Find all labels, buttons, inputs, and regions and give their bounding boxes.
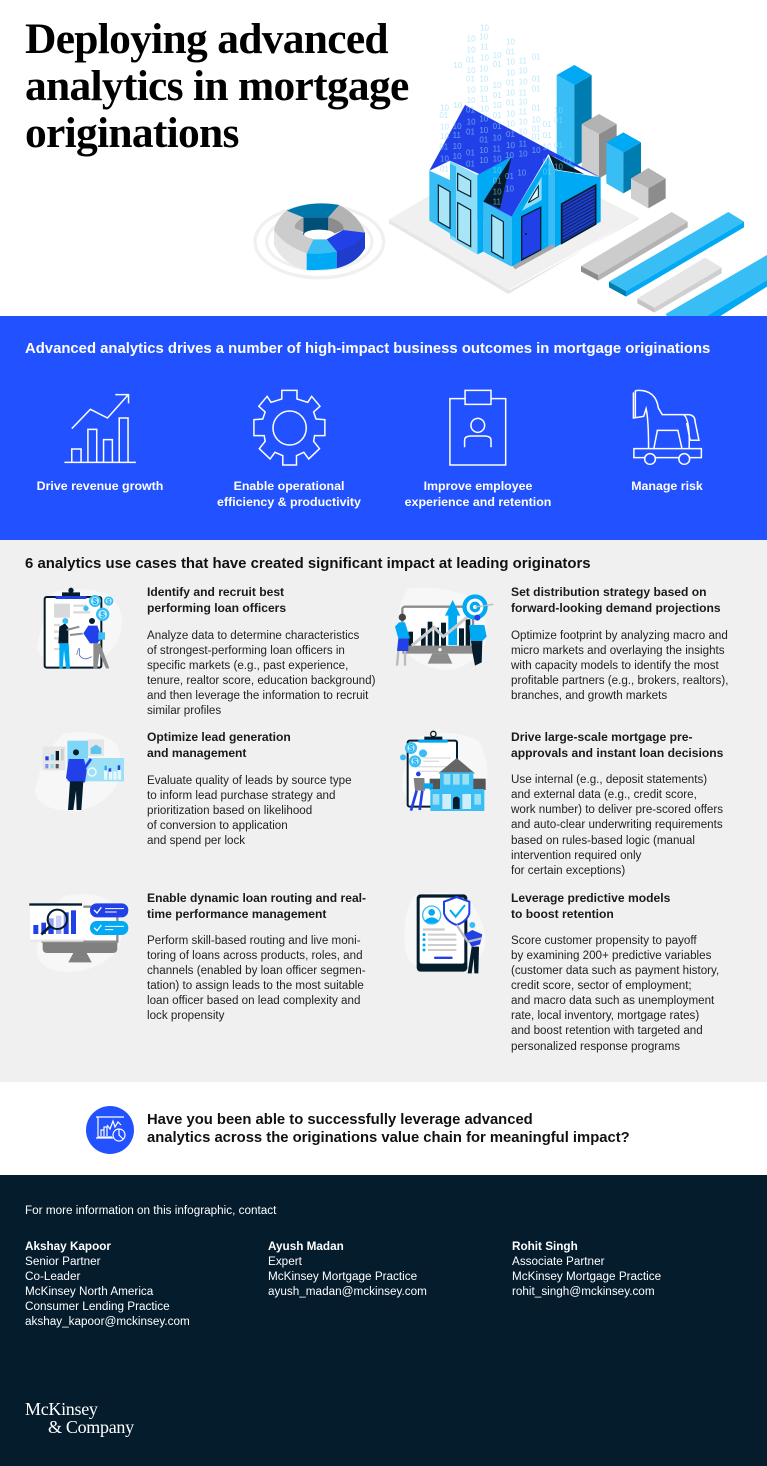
use case 3 heading <box>147 891 366 921</box>
use case 2 text: prioritization based on likelihood <box>147 804 312 817</box>
binary data stream: 10 <box>479 146 489 155</box>
outcome label: efficiency: Enable operational <box>234 479 344 493</box>
use case 5 text: intervention required only <box>511 849 641 862</box>
use case 3 heading: Enable dynamic loan routing and real- <box>147 891 366 905</box>
use case 1 heading: performing loan officers <box>147 601 286 615</box>
illustration: predictive retention <box>416 894 482 974</box>
use case 6 text: and macro data such as unemployment <box>511 994 714 1007</box>
binary data stream: 10 <box>493 101 502 110</box>
use case 5 text <box>511 773 723 877</box>
binary data stream: 10 <box>532 146 541 155</box>
use case 3 text: channels (enabled by loan officer segmen- <box>147 964 366 977</box>
binary data stream: 10 <box>479 64 489 73</box>
binary data stream: 01 <box>466 55 475 64</box>
binary data stream: 10 <box>506 141 515 150</box>
use case 6 text: personalized response programs <box>511 1040 680 1053</box>
use case 4 text: micro markets and overlaying the insights <box>511 644 725 657</box>
use case 2 heading <box>147 730 291 760</box>
contact: Akshay Kapoor: akshay_kapoor@mckinsey.com <box>25 1315 190 1328</box>
use case 1 text: and then leverage the information to recruit <box>147 689 368 702</box>
title: Deploying advanced <box>25 15 388 63</box>
contact: Rohit Singh: Associate Partner <box>512 1255 604 1268</box>
logo: McKinsey & Company <box>25 1399 134 1437</box>
binary data stream: 01 <box>506 79 515 88</box>
outcome label: revenue: Drive revenue growth <box>37 479 163 493</box>
binary data stream: 01 <box>563 156 573 165</box>
hero illustration: platform and bar charts <box>389 65 767 316</box>
icon: presentation analytics <box>86 1106 134 1154</box>
binary data stream: 10 <box>506 119 515 128</box>
use case 3 text: Perform skill-based routing and live moni- <box>147 934 361 946</box>
binary data stream: 10 <box>479 84 489 93</box>
use case 3 text: tation) to assign leads to the most suitable <box>147 979 364 992</box>
call to action question: analytics across the originations value chain for meaningful impact? <box>147 1130 630 1146</box>
binary data stream: 10 <box>493 133 502 142</box>
binary data stream: 10 <box>480 104 489 113</box>
contact: Rohit Singh <box>512 1240 661 1298</box>
outcome label: employee experience: Improve employee <box>424 479 532 493</box>
binary data stream: 01 <box>543 168 552 177</box>
panel: contacts footer <box>0 1175 767 1466</box>
use case 6 heading <box>511 891 670 921</box>
binary data stream: 10 <box>453 61 463 70</box>
outcomes heading: Advanced analytics drives a number of high-impact business outcomes in mortgage originations <box>25 341 710 357</box>
use case 1 text: Analyze data to determine characteristics <box>147 628 359 642</box>
binary data stream: 10 <box>506 69 515 78</box>
use case 5 text: for certain exceptions) <box>511 864 625 877</box>
contact: Akshay Kapoor <box>25 1240 190 1328</box>
binary data stream: 01 <box>439 143 449 152</box>
use case 5 text: work number) to deliver pre-scored offers <box>511 803 723 816</box>
platform <box>389 150 638 294</box>
binary data stream: 10 <box>506 38 515 47</box>
use case 3 text: lock propensity <box>147 1009 224 1022</box>
outcome label: employee experience: experience and retention <box>405 495 551 509</box>
binary data stream: 01 <box>532 53 541 62</box>
binary data stream: 01 <box>493 91 502 100</box>
binary data stream: 01 <box>532 124 541 133</box>
illustration: recruit loan officers <box>44 588 114 669</box>
binary data stream: 01 <box>554 116 563 125</box>
binary data stream: 10 <box>493 188 502 197</box>
binary data stream: 11 <box>519 108 528 117</box>
binary data stream: 11 <box>480 43 489 52</box>
use case 2 text: Evaluate quality of leads by source type <box>147 774 352 786</box>
use case 4 text: branches, and growth markets <box>511 689 667 702</box>
use case 6 text <box>511 934 719 1053</box>
use case 4 text <box>511 628 728 702</box>
contact: Akshay Kapoor: Consumer Lending Practice <box>25 1300 170 1313</box>
binary data stream <box>439 23 573 207</box>
binary data stream: 10 <box>517 169 527 178</box>
binary data stream: 10 <box>467 66 476 75</box>
binary data stream: 11 <box>480 94 489 103</box>
binary data stream: 10 <box>493 166 502 175</box>
binary data stream: 10 <box>479 33 489 42</box>
use case 6 text: (customer data such as payment history, <box>511 964 719 977</box>
use case 1 text: similar profiles <box>147 704 221 717</box>
binary data stream: 01 <box>532 133 541 142</box>
use case 1 heading: Identify and recruit best <box>147 585 284 599</box>
use case 5 text: Use internal (e.g., deposit statements) <box>511 773 707 786</box>
contact: Akshay Kapoor: Akshay Kapoor <box>25 1240 111 1253</box>
binary data stream: 01 <box>543 158 552 167</box>
binary data stream: 10 <box>440 132 449 141</box>
use case 6 text: credit score, sector of employment; <box>511 979 692 992</box>
binary data stream: 10 <box>519 149 528 158</box>
binary data stream: 01 <box>439 111 449 120</box>
binary data stream: 11 <box>519 57 528 66</box>
use case 6 text: rate, local inventory, mortgage rates) <box>511 1009 699 1022</box>
binary data stream: 01 <box>532 84 541 93</box>
use case 4 text: profitable partners (e.g., brokers, realtors), <box>511 674 728 687</box>
binary data stream: 10 <box>506 89 515 98</box>
binary data stream: 10 <box>440 123 449 132</box>
binary data stream: 10 <box>440 103 449 112</box>
illustration: recruit loan officers: $ <box>107 599 111 605</box>
use case 3 heading: time performance management <box>147 907 326 921</box>
binary data stream: 01 <box>479 135 489 144</box>
illustration: recruit loan officers: $ <box>93 597 98 606</box>
use case 1 text <box>147 628 375 717</box>
call to action question <box>147 1112 630 1146</box>
flat bars <box>581 212 767 318</box>
binary data stream: 01 <box>532 103 541 112</box>
use case 2 text: of conversion to application <box>147 819 288 832</box>
use case 2 text: and spend per lock <box>147 834 245 847</box>
binary data stream: 10 <box>519 78 528 87</box>
contact: Ayush Madan: Ayush Madan <box>268 1240 344 1253</box>
use case 1 text: specific markets (e.g., past experience, <box>147 659 348 672</box>
use case 4 text: Optimize footprint by analyzing macro and <box>511 628 728 642</box>
binary data stream: 01 <box>532 74 541 83</box>
use case 6 heading: Leverage predictive models <box>511 891 670 905</box>
contact: Akshay Kapoor: Senior Partner <box>25 1255 101 1268</box>
logo: McKinsey & Company: & Company <box>48 1417 134 1437</box>
use case 6 text: by examining 200+ predictive variables <box>511 949 711 962</box>
icon: trojan horse <box>632 390 702 465</box>
outcome label: efficiency: efficiency & productivity <box>217 495 361 509</box>
binary data stream: 01 <box>505 172 514 181</box>
title: analytics in mortgage <box>25 62 409 110</box>
binary data stream: 01 <box>466 128 475 137</box>
outcome label: employee experience <box>405 479 551 509</box>
binary data stream: 01 <box>466 105 475 114</box>
binary data stream: 10 <box>453 152 462 161</box>
illustration: recruit loan officers: $ <box>100 609 105 619</box>
binary data stream: 10 <box>519 128 528 137</box>
call to action question: Have you been able to successfully leverage advanced <box>147 1112 533 1128</box>
binary data stream: 10 <box>554 106 563 115</box>
binary data stream: 01 <box>440 164 449 173</box>
use case 5 text: and auto-clear underwriting requirements <box>511 818 723 831</box>
binary data stream: 10 <box>519 118 528 127</box>
use case 4 heading <box>511 585 721 615</box>
binary data stream: 01 <box>506 48 515 57</box>
use case 2 heading: Optimize lead generation <box>147 730 291 744</box>
donut chart <box>254 203 386 280</box>
binary data stream: 10 <box>440 154 449 163</box>
use cases heading: 6 analytics use cases that have created significant impact at leading originators <box>25 555 591 572</box>
binary data stream: 01 <box>493 111 502 120</box>
contact: Akshay Kapoor: Co-Leader <box>25 1270 80 1283</box>
use case 1 heading <box>147 585 286 615</box>
use case 4 heading: Set distribution strategy based on <box>511 585 707 599</box>
use case 2 heading: and management <box>147 746 246 760</box>
binary data stream: 01 <box>466 74 475 83</box>
binary data stream: 11 <box>453 131 462 140</box>
use case 5 heading: Drive large-scale mortgage pre- <box>511 730 692 744</box>
use case 3 text: loan officer based on lead complexity and <box>147 994 360 1007</box>
contact: Rohit Singh: Rohit Singh <box>512 1240 578 1253</box>
illustration: pre-approvals: $ <box>409 744 414 753</box>
illustration: distribution strategy <box>395 594 494 666</box>
binary data stream: 10 <box>493 81 502 90</box>
icon: gear <box>253 390 326 466</box>
binary data stream: 10 <box>467 34 476 43</box>
contact: Akshay Kapoor: McKinsey North America <box>25 1285 153 1298</box>
binary data stream: 10 <box>479 74 489 83</box>
binary data stream: 10 <box>467 45 476 54</box>
footer intro: For more information on this infographic, contact <box>25 1204 276 1217</box>
house <box>429 105 601 269</box>
binary data stream: 10 <box>467 118 476 127</box>
illustration: pre-approvals: $ <box>413 757 418 766</box>
title: originations <box>25 109 239 157</box>
contact: Ayush Madan: ayush_madan@mckinsey.com <box>268 1285 427 1298</box>
use case 1 text: tenure, realtor score, education background) <box>147 674 375 687</box>
vertical bars <box>557 65 666 208</box>
icon: revenue growth chart <box>64 394 136 464</box>
use case 2 text <box>147 774 352 847</box>
use case 5 heading <box>511 730 723 760</box>
use case 5 text: and external data (e.g., credit score, <box>511 788 697 801</box>
use case 6 text: Score customer propensity to payoff <box>511 934 697 946</box>
panel: analytics use cases <box>0 540 767 1082</box>
binary data stream: 10 <box>519 67 528 76</box>
use case 5 text: based on rules-based logic (manual <box>511 834 695 847</box>
use case 3 text <box>147 934 366 1022</box>
binary data stream: 10 <box>453 101 463 110</box>
binary data stream: 11 <box>519 89 528 98</box>
binary data stream: 01 <box>543 120 552 129</box>
use case 4 text: with capacity models to identify the most <box>511 659 719 672</box>
binary data stream: 01 <box>493 122 502 131</box>
panel: business outcomes <box>0 316 767 540</box>
use case 3 text: toring of loans across products, roles, and <box>147 949 363 962</box>
binary data stream: 10 <box>532 115 541 124</box>
title <box>25 15 409 157</box>
binary data stream: 10 <box>554 163 563 172</box>
binary data stream: 01 <box>493 60 502 69</box>
binary data stream: 10 <box>467 85 476 94</box>
binary data stream: 10 <box>506 58 515 67</box>
binary data stream: 01 <box>466 159 475 168</box>
contact: Ayush Madan <box>268 1240 427 1298</box>
binary data stream: 10 <box>453 122 462 131</box>
use case 2 text: to inform lead purchase strategy and <box>147 789 335 802</box>
binary data stream: 10 <box>453 142 462 151</box>
binary data stream: 01 <box>506 99 515 108</box>
use case 6 text: and boost retention with targeted and <box>511 1024 703 1037</box>
binary data stream: 10 <box>480 53 489 62</box>
binary data stream: 10 <box>505 184 514 193</box>
use case 4 heading: forward-looking demand projections <box>511 601 721 615</box>
binary data stream: 10 <box>506 109 515 118</box>
binary data stream: 10 <box>493 154 502 163</box>
outcome label: risk: Manage risk <box>631 479 703 493</box>
outcome label: efficiency <box>217 479 361 509</box>
contact: Ayush Madan: McKinsey Mortgage Practice <box>268 1270 417 1283</box>
illustration: lead generation <box>43 740 124 810</box>
contact: Rohit Singh: rohit_singh@mckinsey.com <box>512 1285 655 1298</box>
binary data stream: 10 <box>493 51 502 60</box>
illustration: pre-approvals <box>400 730 486 811</box>
binary data stream: 11 <box>493 144 502 153</box>
binary data stream: 10 <box>519 98 528 107</box>
binary data stream: 10 <box>479 156 489 165</box>
binary data stream: 01 <box>554 141 563 150</box>
binary data stream: 01 <box>493 176 502 185</box>
use case 5 heading: approvals and instant loan decisions <box>511 746 723 760</box>
binary data stream: 10 <box>467 96 476 105</box>
icon: employee badge <box>449 390 506 466</box>
binary data stream: 11 <box>519 139 528 148</box>
use case 6 heading: to boost retention <box>511 907 614 921</box>
binary data stream: 01 <box>543 131 552 140</box>
contact: Ayush Madan: Expert <box>268 1255 302 1268</box>
use case 1 text: of strongest-performing loan officers in <box>147 644 345 657</box>
logo: McKinsey & Company: McKinsey <box>25 1399 98 1419</box>
binary data stream: 10 <box>505 151 514 160</box>
binary data stream: 10 <box>479 114 489 123</box>
binary data stream: 01 <box>466 149 475 158</box>
binary data stream: 10 <box>479 126 489 135</box>
binary data stream: 10 <box>543 143 552 152</box>
house with binary data stream <box>429 23 601 270</box>
binary data stream: 10 <box>480 23 489 32</box>
binary data stream: 01 <box>506 130 515 139</box>
illustration: loan routing <box>29 903 128 962</box>
binary data stream: 11 <box>493 198 502 207</box>
contact: Rohit Singh: McKinsey Mortgage Practice <box>512 1270 661 1283</box>
